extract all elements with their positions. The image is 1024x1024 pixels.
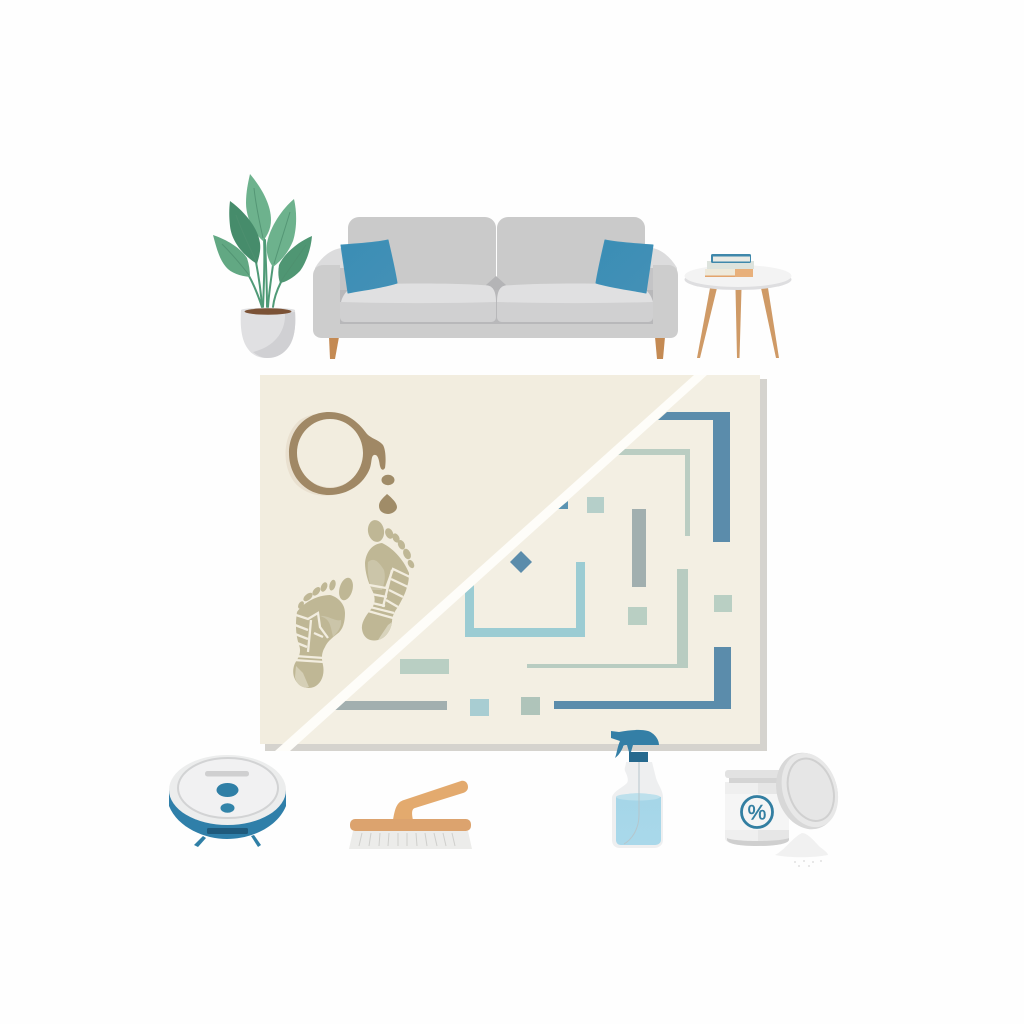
tread gaps: [368, 569, 410, 618]
toes: [297, 576, 355, 610]
sole silhouette: [293, 595, 345, 688]
powder pile: [775, 833, 828, 857]
right footprint: [362, 519, 416, 641]
stain droplet: [382, 475, 394, 485]
sofa left leg: [329, 337, 339, 359]
grey bar: [632, 509, 646, 587]
blue diamond: [510, 551, 532, 573]
sofa right leg: [655, 337, 665, 359]
left footprint: [293, 576, 355, 688]
powder specks: [794, 860, 822, 867]
dip tube: [624, 762, 639, 844]
plant stems: [249, 238, 281, 307]
sole wash: [368, 560, 385, 590]
rug shadow: [265, 379, 767, 751]
scrub brush: [349, 781, 472, 849]
grey-green square: [521, 697, 540, 715]
grey long bar: [334, 701, 447, 710]
percent badge: [742, 796, 772, 828]
white diagonal divider: [275, 375, 707, 751]
jar neck: [729, 778, 787, 783]
sage square centre: [628, 607, 647, 625]
left seat cushion: [341, 284, 496, 303]
leaf veins: [222, 188, 306, 281]
stack of books: [705, 254, 754, 277]
spray bottle: [611, 730, 663, 848]
rug: [260, 375, 767, 751]
right back cushion: [497, 217, 645, 292]
robot top: [169, 755, 286, 825]
robot wheels: [194, 836, 206, 847]
plant: [213, 174, 312, 358]
sage corner: [618, 449, 690, 536]
cushion gap diamond: [486, 276, 506, 293]
right pillow: [596, 240, 653, 293]
bottle body: [612, 762, 663, 848]
liquid surface: [616, 794, 660, 800]
robot bar: [205, 771, 249, 776]
bottle collar: [629, 752, 648, 762]
robot vacuum: [169, 755, 286, 847]
bristles: [349, 831, 472, 849]
stain halo: [286, 414, 362, 496]
top blue corner: [658, 412, 730, 542]
rug pattern: clean side: [334, 412, 732, 716]
left seat front: [340, 302, 496, 322]
table top: [684, 269, 792, 290]
bottle liquid: [616, 793, 661, 845]
toes: [366, 519, 416, 569]
left pillow: [341, 240, 397, 293]
jar body: [725, 782, 789, 846]
cyan bracket: [465, 562, 585, 637]
long sage corner: [527, 569, 688, 668]
bottom blue corner: [554, 647, 731, 709]
stain ring with drip: [289, 412, 386, 495]
jar shaded side: [758, 782, 789, 846]
left arm top: [315, 248, 347, 300]
sofa: [313, 217, 678, 359]
bristle lines: [359, 833, 455, 846]
plant leaves: [246, 174, 271, 241]
percent sign: %: [748, 802, 766, 824]
sage square right: [714, 595, 732, 612]
plant pot: [241, 308, 295, 358]
jar base: [727, 838, 789, 846]
brush block: [350, 819, 471, 831]
cyan square: [470, 699, 489, 716]
stain centre: [296, 419, 364, 487]
tread gaps: [294, 613, 328, 662]
seat backing: [340, 290, 653, 324]
right arm inner: [644, 268, 654, 302]
robot inner ring: [178, 758, 278, 818]
pot soil: [244, 308, 292, 315]
right seat front: [497, 302, 653, 322]
coffee stain: [286, 412, 397, 514]
robot small button: [220, 803, 234, 813]
sage square: [587, 497, 604, 513]
sole silhouette: [362, 543, 409, 641]
stain teardrop: [379, 494, 397, 514]
heel wash: [295, 666, 309, 687]
jar rim: [725, 770, 790, 778]
sole wash: [320, 616, 341, 637]
spray trigger head: [611, 730, 659, 758]
left arm inner: [339, 268, 349, 302]
sage bar: [400, 659, 449, 674]
sofa base and arms: [313, 265, 678, 338]
heel wash: [378, 622, 392, 640]
baking soda jar: [725, 745, 848, 867]
table legs: [697, 288, 717, 358]
brush handle: [393, 781, 468, 820]
robot slot: [207, 828, 248, 834]
small blue triangle: [558, 501, 568, 509]
right seat cushion: [497, 284, 653, 303]
robot main button: [216, 783, 238, 797]
clean half tint: [290, 375, 760, 744]
jar label: [725, 794, 789, 830]
robot body: [169, 790, 286, 839]
left back cushion: [348, 217, 496, 292]
rug body: [260, 375, 760, 744]
jar lid: [766, 745, 848, 837]
side table: [684, 254, 792, 358]
right arm top: [646, 248, 677, 300]
